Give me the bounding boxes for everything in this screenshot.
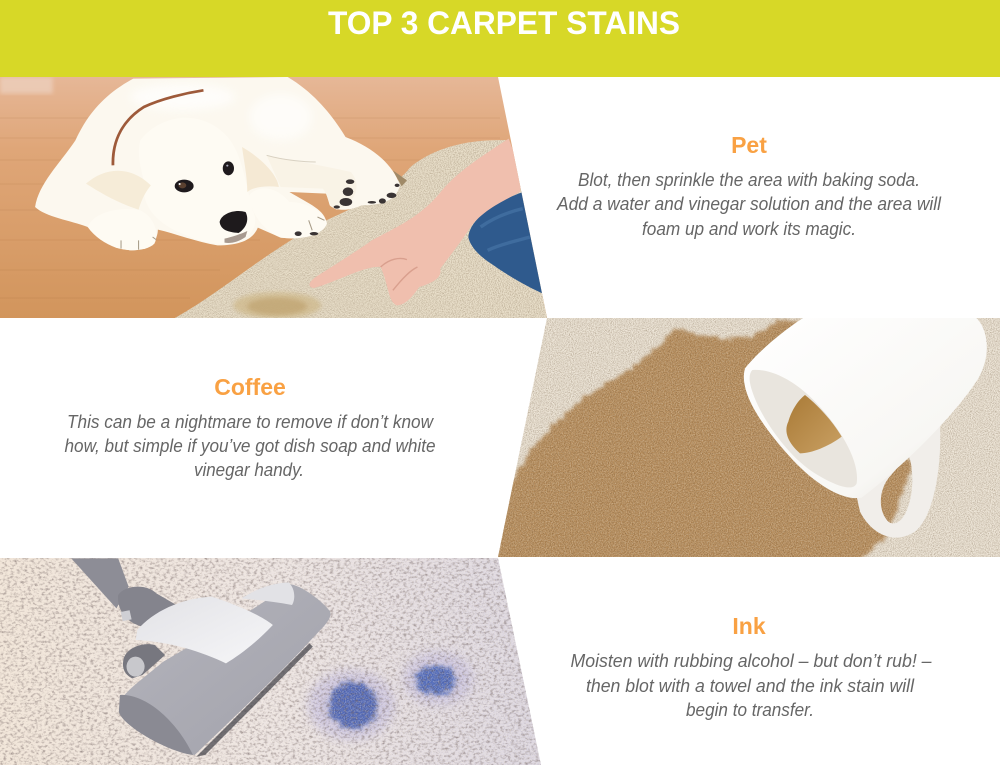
head xyxy=(139,118,255,244)
text: pet tip xyxy=(556,170,942,239)
wand xyxy=(71,558,129,608)
body xyxy=(744,317,987,498)
handle xyxy=(857,425,940,538)
panel: ink photo xyxy=(0,555,570,765)
puppy xyxy=(35,77,407,250)
text: ink tip: then blot with a towel and the ink stain will xyxy=(586,676,915,696)
body xyxy=(119,584,330,755)
text: ink tip: Moisten with rubbing alcohol – but don’t rub! – xyxy=(570,651,932,671)
nose xyxy=(220,211,247,233)
front leg right xyxy=(276,218,327,238)
back leg and paw xyxy=(267,155,357,210)
shag carpet xyxy=(0,555,570,765)
top hatch xyxy=(136,597,273,663)
text: coffee tip: vinegar handy. xyxy=(194,460,304,480)
urine stain xyxy=(233,292,321,319)
front paw left xyxy=(88,227,156,250)
jeans xyxy=(468,192,542,294)
ear right xyxy=(242,147,279,192)
blurred background highlight xyxy=(0,77,53,94)
panel: coffee photo xyxy=(495,315,1000,562)
text: pet tip: foam up and work its magic. xyxy=(642,219,856,239)
heading: Coffee: Coffee xyxy=(214,374,286,400)
vacuum xyxy=(71,558,330,757)
ear left xyxy=(86,171,151,210)
coffee inside xyxy=(786,395,842,453)
wheel xyxy=(123,644,165,678)
mug xyxy=(744,317,987,538)
text: ink tip xyxy=(570,651,932,720)
title: TOP 3 CARPET STAINS xyxy=(328,5,680,41)
text: ink tip: begin to transfer. xyxy=(686,700,814,720)
text: coffee tip xyxy=(64,412,436,480)
ink stains xyxy=(308,652,473,740)
coffee stain xyxy=(495,320,912,562)
text: pet tip: Add a water and vinegar solution and the area will xyxy=(556,194,942,214)
hand xyxy=(309,139,521,305)
mug opening xyxy=(750,370,857,487)
text: coffee tip: This can be a nightmare to remove if don’t know xyxy=(67,412,434,432)
rug xyxy=(175,140,547,318)
collar xyxy=(113,90,203,165)
text: coffee tip: how, but simple if you’ve got dish soap and white xyxy=(64,436,436,456)
header band xyxy=(0,0,1000,77)
cream carpet xyxy=(495,315,1000,562)
paw pads xyxy=(295,179,400,236)
panel: pet photo xyxy=(0,77,558,324)
eyes xyxy=(175,180,194,192)
heading: Ink: Ink xyxy=(732,613,766,639)
text: pet tip: Blot, then sprinkle the area with baking soda. xyxy=(578,170,920,190)
heading: Pet: Pet xyxy=(731,132,767,158)
